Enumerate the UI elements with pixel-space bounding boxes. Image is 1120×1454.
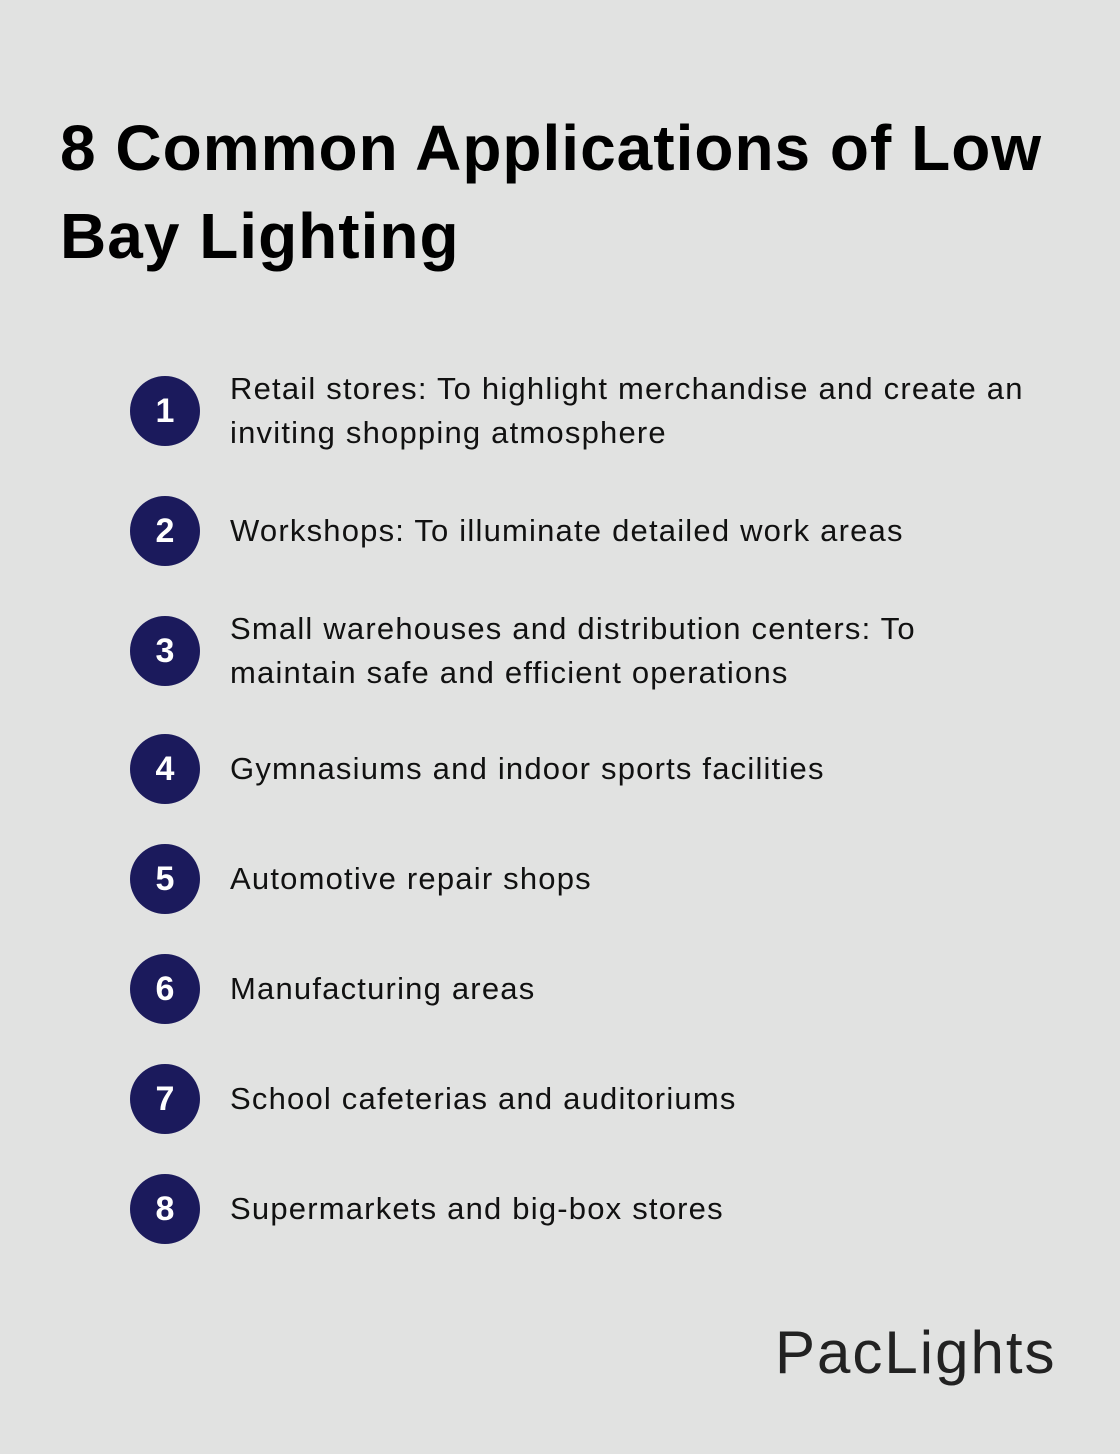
- item 8: Supermarkets and big-box stores: [230, 1191, 724, 1226]
- item 5: 5: [156, 860, 174, 898]
- item 1: [130, 371, 1024, 450]
- item 4: [130, 734, 825, 804]
- item 1: inviting shopping atmosphere: [230, 415, 667, 450]
- item 6: [130, 954, 535, 1024]
- item 8: 8: [156, 1190, 174, 1228]
- item 1: Retail stores: To highlight merchandise and create an: [230, 371, 1024, 406]
- item 3: maintain safe and efficient operations: [230, 655, 789, 690]
- item 2: 2: [156, 512, 174, 550]
- title: [60, 112, 1042, 272]
- item 7: [130, 1064, 737, 1134]
- item 7: 7: [156, 1080, 174, 1118]
- item 4: Gymnasiums and indoor sports facilities: [230, 751, 825, 786]
- item 3: [130, 611, 916, 690]
- item 2: [130, 496, 904, 566]
- title: 8 Common Applications of Low: [60, 112, 1042, 184]
- item 5: Automotive repair shops: [230, 861, 592, 896]
- title: Bay Lighting: [60, 200, 460, 272]
- item 1: 1: [156, 392, 174, 430]
- item 3: Small warehouses and distribution centers: To: [230, 611, 916, 646]
- item 8: [130, 1174, 724, 1244]
- logo: PacLights: [775, 1319, 1056, 1386]
- item 4: 4: [156, 750, 174, 788]
- item 3: 3: [156, 632, 174, 670]
- item 5: [130, 844, 592, 914]
- item 6: 6: [156, 970, 174, 1008]
- item 6: Manufacturing areas: [230, 971, 535, 1006]
- item 7: School cafeterias and auditoriums: [230, 1081, 737, 1116]
- item 2: Workshops: To illuminate detailed work areas: [230, 513, 904, 548]
